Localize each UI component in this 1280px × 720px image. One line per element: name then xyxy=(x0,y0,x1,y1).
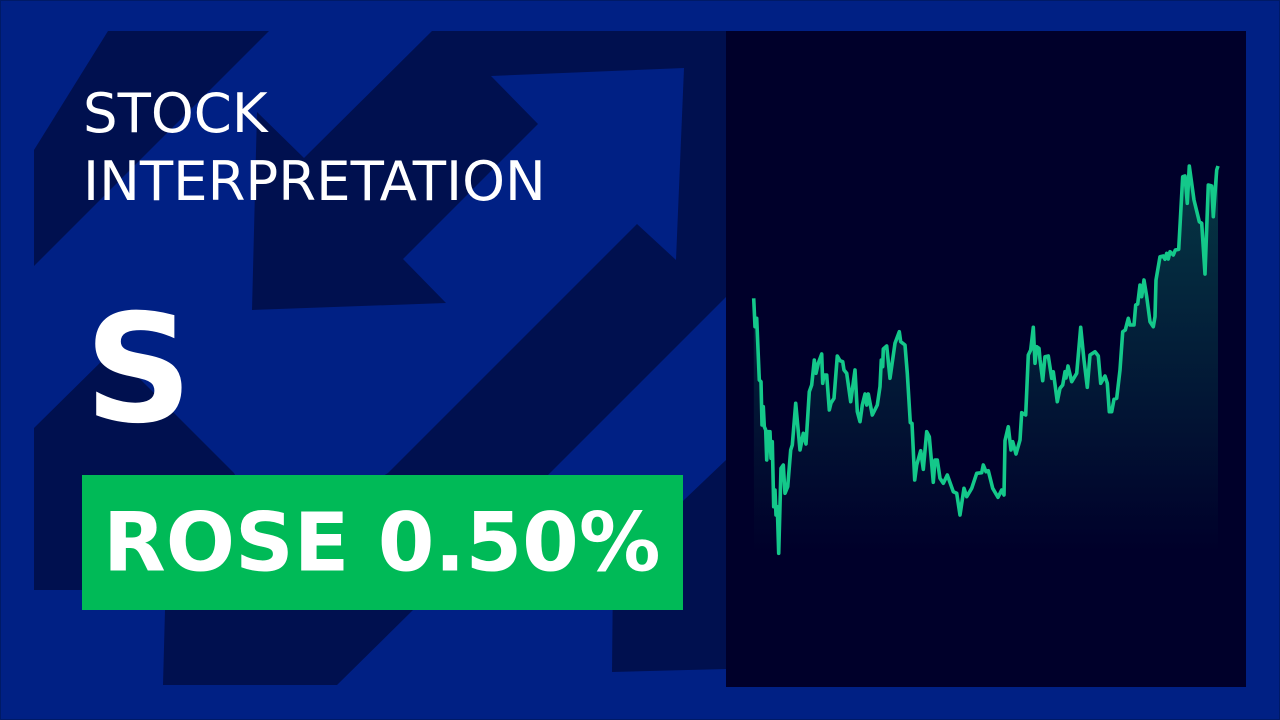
chart price line xyxy=(754,166,1218,553)
callout: rose percentage xyxy=(82,475,683,610)
chart: price line with area fill xyxy=(754,166,1218,553)
callout text: ROSE 0.50% xyxy=(103,496,661,590)
chart area fill xyxy=(754,166,1218,553)
panel: chart background xyxy=(726,31,1246,687)
callout background xyxy=(82,475,683,610)
ticker symbol: S xyxy=(84,283,193,457)
title: INTERPRETATION xyxy=(83,149,546,213)
title: STOCK xyxy=(83,81,269,145)
background arrow shapes xyxy=(34,31,726,685)
